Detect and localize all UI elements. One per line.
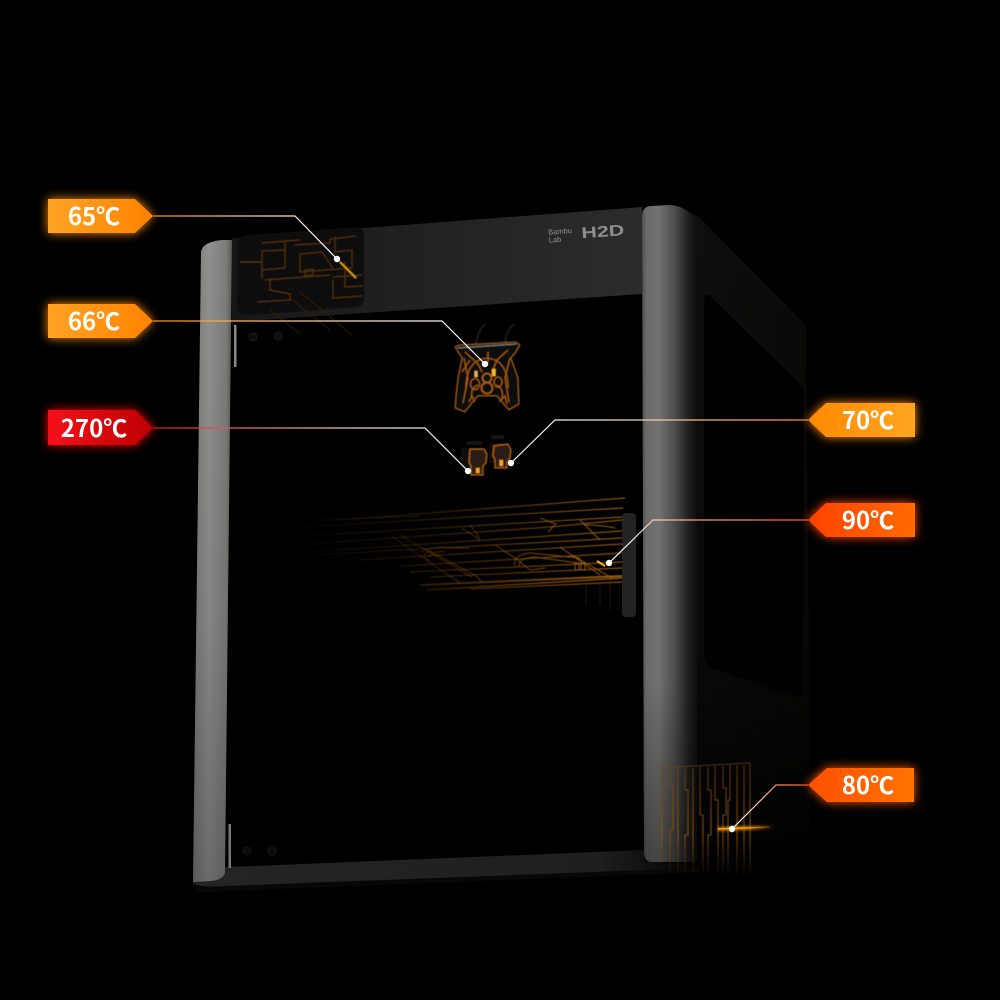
cables [476, 324, 515, 345]
leader line: 80°C [729, 785, 808, 832]
tag: 70°C: 70℃ [842, 401, 894, 436]
rear vent circuit [658, 763, 750, 880]
leader line: 65°C [153, 216, 340, 262]
leader line: 66°C [153, 321, 488, 367]
printer body [193, 205, 811, 892]
vent hot spot [718, 827, 775, 829]
door hinges and screws [228, 325, 282, 868]
extruder highlights [458, 344, 516, 348]
tag: 80°C: 80℃ [842, 766, 894, 801]
control panel with circuit lines [237, 227, 364, 335]
gantry shadows [395, 344, 628, 420]
heated bed circuit [286, 498, 625, 610]
left hotend [461, 441, 487, 475]
brand logo: Bambu [548, 226, 572, 237]
right hotend [489, 435, 511, 468]
right side panel [690, 212, 811, 875]
leader line: 70°C [508, 420, 808, 466]
left door post [193, 240, 232, 882]
tag: 66°C [48, 302, 153, 338]
tag: 65°C: 65℃ [68, 197, 120, 232]
top front band [232, 207, 642, 322]
tag: 270°C [48, 409, 153, 445]
tag: 270°C: 270℃ [61, 409, 127, 444]
brand logo: H2D [581, 222, 625, 242]
tag: 80°C [808, 766, 914, 802]
right corner post [642, 205, 697, 862]
bottom rail [193, 850, 700, 892]
leader line: 270°C [153, 428, 471, 474]
bed hot spot [597, 561, 605, 566]
tag: 90°C: 90℃ [842, 501, 894, 536]
brand logo: Lab [548, 235, 562, 245]
tag: 70°C [808, 401, 915, 437]
leader line: 90°C [606, 520, 808, 566]
toolhead and gantry [395, 324, 628, 475]
brand logo [548, 222, 625, 245]
tag: 90°C [808, 501, 915, 537]
tag: 66°C: 66℃ [68, 302, 120, 337]
extruder outline [455, 342, 520, 412]
door handle [622, 513, 636, 617]
tag: 65°C [48, 197, 153, 233]
